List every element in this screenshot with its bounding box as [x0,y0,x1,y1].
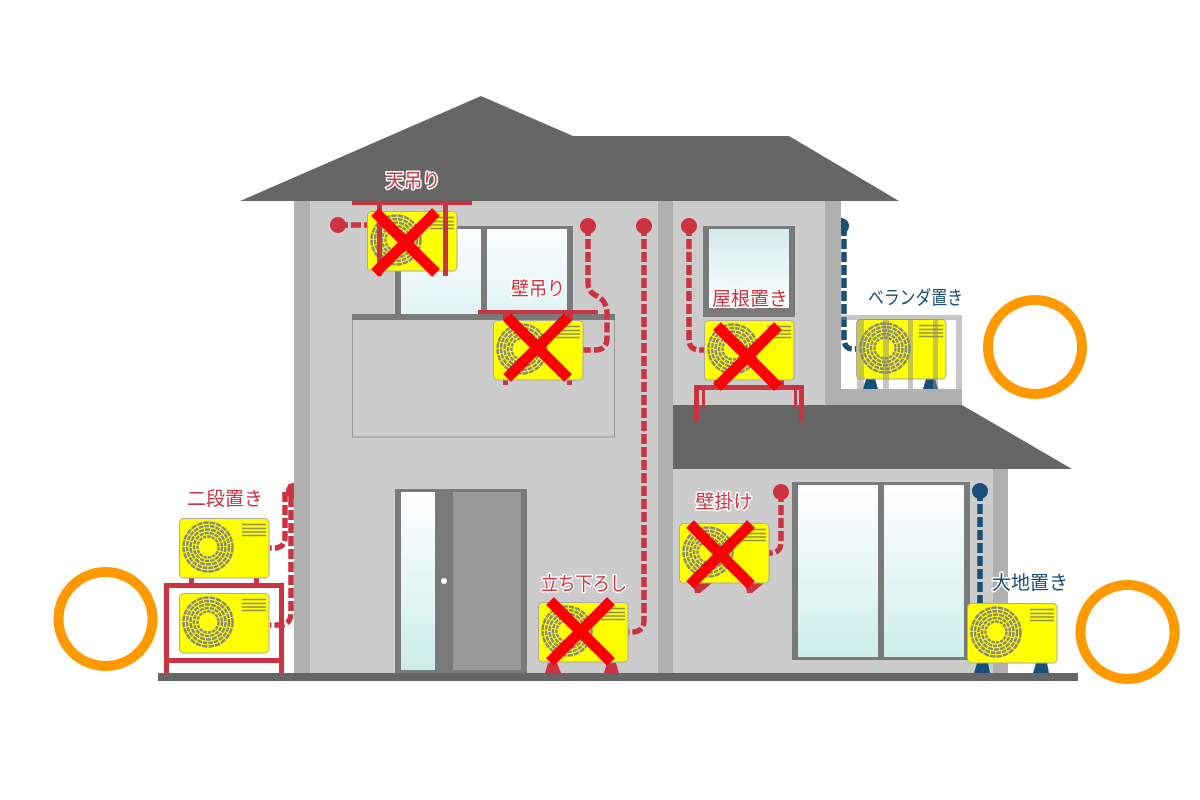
label: ベランダ置き: ベランダ置き [868,287,963,309]
feet [863,379,938,389]
feet [545,663,619,673]
placement: veranda (ベランダ置き) [841,218,963,389]
ground line [158,673,1078,681]
placement: roof stand (屋根置き) [681,218,804,422]
not recommended mark [717,326,778,387]
large sliding window [792,482,970,660]
brackets [693,583,764,593]
house walls [294,200,1008,675]
not recommended mark [690,524,751,585]
orange circle: ground OK [1080,585,1174,679]
outdoor unit [494,320,583,380]
upper-left window [395,226,573,320]
balcony floor [841,389,962,405]
outdoor unit [704,320,794,380]
main roof [240,96,899,201]
bracket [478,310,598,385]
two-level stand [164,578,284,673]
label: 二段置き: 二段置き [187,488,263,510]
placement: ground (大地置き) [968,483,1068,673]
not recommended mark [550,601,611,662]
placement: wall-hung from ceiling (天吊り) [330,171,472,276]
outdoor unit [680,524,769,583]
label: 大地置き: 大地置き [992,572,1068,594]
outdoor unit [856,320,946,379]
placement: drop pipe (立ち下ろし) [538,218,652,673]
upper outdoor unit [180,518,269,578]
orange circle: veranda OK [988,300,1082,394]
roof stand [694,380,804,422]
lower roof [673,405,1072,469]
pipe: veranda unit [841,218,856,349]
label: 屋根置き: 屋根置き [712,288,788,310]
outdoor unit [968,604,1057,663]
pipe: ground unit [972,483,988,604]
outdoor unit [368,212,457,271]
hanging rods [377,205,448,276]
veranda railing [841,315,962,389]
label: 立ち下ろし: 立ち下ろし [541,573,627,595]
not recommended mark [507,317,568,378]
pipe: roof unit [681,218,704,350]
pipes [270,492,285,548]
pipe: ceiling unit [330,217,367,233]
label: 壁掛け: 壁掛け [695,491,753,513]
label: 壁吊り: 壁吊り [511,278,565,300]
orange circle: double stack OK [58,572,152,666]
not recommended mark [375,212,436,273]
ceiling bracket bar [352,201,472,205]
label: 天吊り: 天吊り [386,171,440,192]
placement: double stack (二段置き) [164,483,294,673]
pipe end [286,483,294,499]
balcony panel on upper floor [352,314,615,437]
pipe: wall mounted unit [768,484,789,553]
pipe: long vertical run [628,218,652,632]
lower outdoor unit [180,594,269,653]
feet [974,663,1049,673]
placement: wall bracket high (壁吊り) [478,218,607,385]
pipe: high wall unit [580,218,607,350]
upper-right window [703,226,795,317]
outdoor unit [538,602,628,662]
placement: wall mount (壁掛け) [680,484,789,593]
entrance door [395,489,527,673]
